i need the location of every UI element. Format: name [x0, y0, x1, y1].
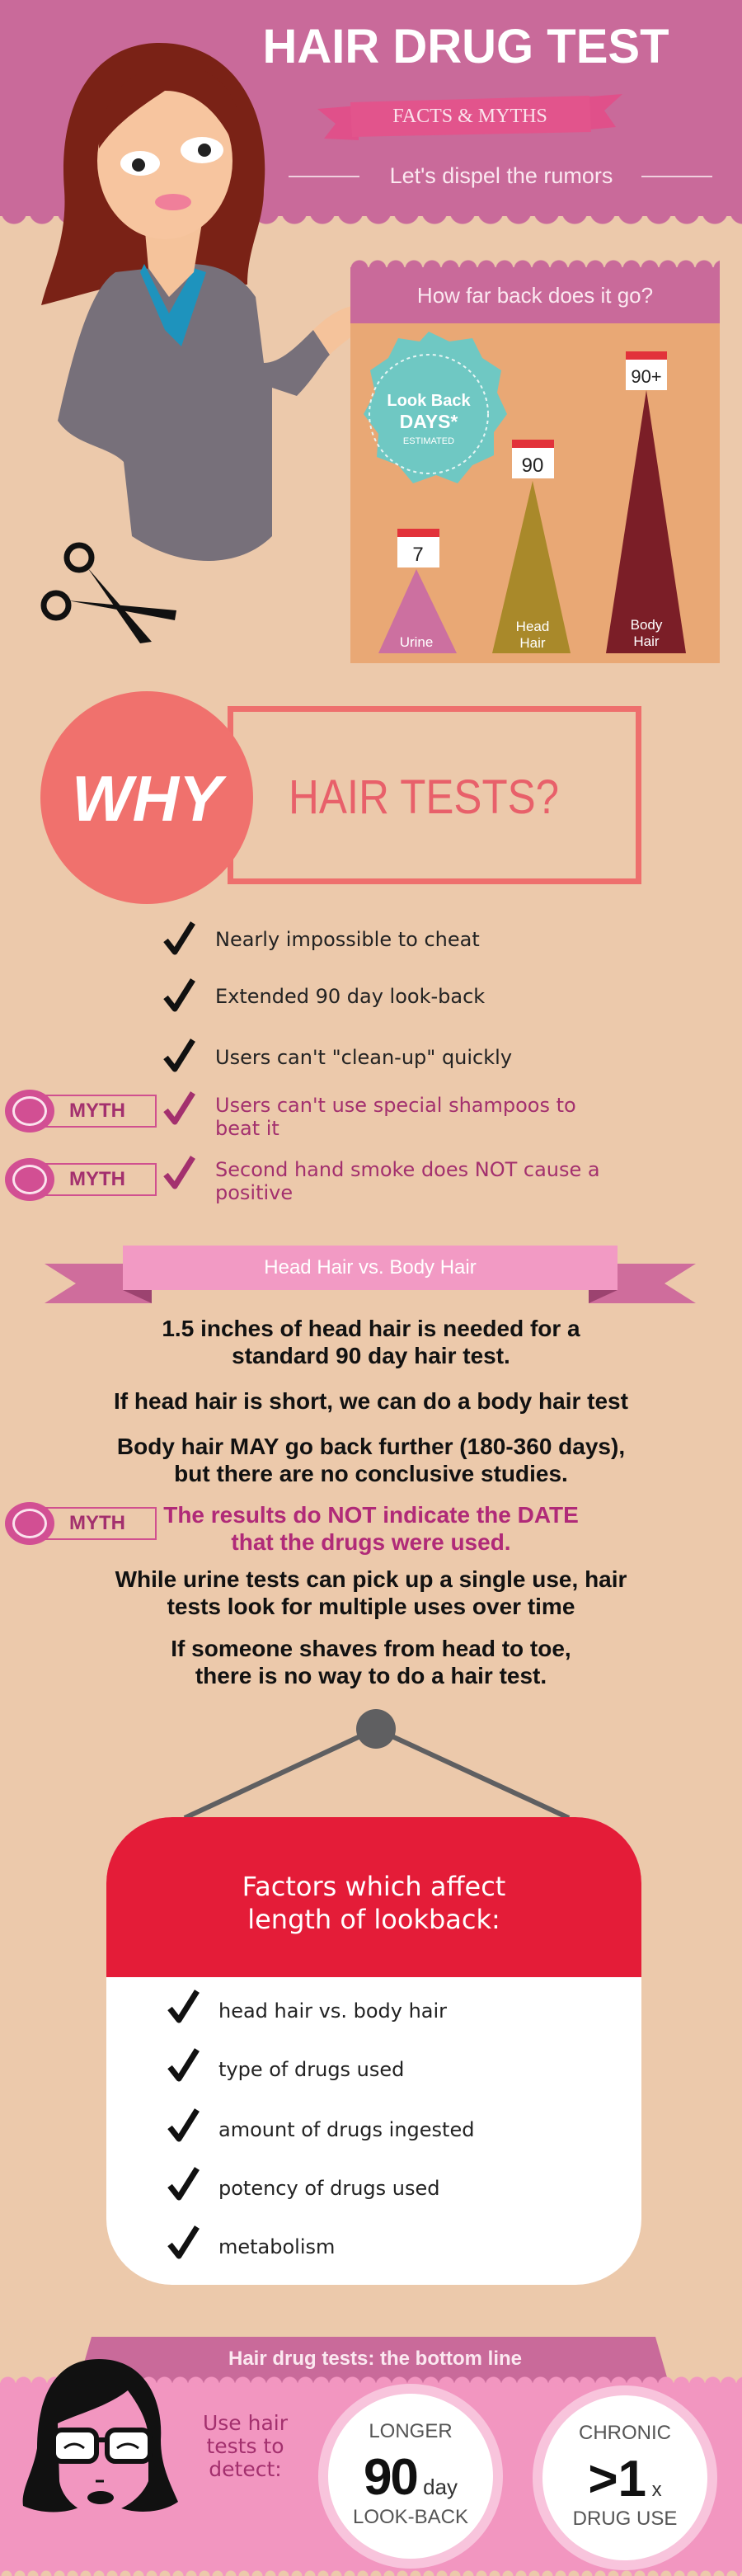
text block: head vs body hair facts: tests look for multiple uses over time [167, 1594, 575, 1619]
text: use hair tests to detect: Use hair [203, 2411, 288, 2435]
myth badge 3: MYTH [69, 1512, 125, 1534]
text: use hair tests to detect: tests to [206, 2434, 284, 2458]
panel: how far back does it go [350, 260, 720, 663]
ribbon: head hair vs body hair: Head Hair vs. Body Hair [264, 1256, 477, 1279]
panel: bottom line [0, 2383, 742, 2576]
factors list: potency of drugs used [218, 2177, 440, 2200]
circle: chronic drug use: DRUG USE [573, 2508, 677, 2530]
factors list: type of drugs used [218, 2058, 404, 2081]
text block: head vs body hair facts: The results do NOT indicate the DATE [163, 1502, 579, 1528]
ribbon: facts & myths: FACTS & MYTHS [392, 106, 547, 127]
text block: head vs body hair facts: that the drugs were used. [231, 1529, 511, 1555]
panel: how far back does it go: 90+ [631, 366, 662, 387]
text block: head vs body hair facts: Body hair MAY go back further (180-360 days), [117, 1434, 625, 1459]
text block: head vs body hair facts: there is no way to do a hair test. [195, 1663, 547, 1688]
list: why reasons: Users can't "clean-up" quickly [215, 1046, 512, 1069]
circle: chronic drug use: CHRONIC [579, 2422, 671, 2444]
heading: why hair tests: WHY [72, 762, 222, 835]
list: why reasons: Users can't use special shampoos to [215, 1094, 576, 1117]
ribbon: facts & myths [317, 94, 622, 140]
myth badge 2: MYTH [69, 1168, 125, 1190]
circle: 90 day look-back [318, 2384, 503, 2569]
circle: chronic drug use: >1 x [588, 2451, 662, 2508]
panel: how far back does it go: 7 [412, 544, 424, 566]
circle: 90 day look-back: LONGER [369, 2420, 453, 2442]
myth badge 2 [5, 1158, 157, 1201]
icon: sign hanger [183, 1709, 571, 1817]
title: HAIR DRUG TEST [262, 20, 669, 73]
panel: how far back does it go: How far back does it go? [417, 283, 653, 308]
text block: head vs body hair facts: standard 90 day hair test. [232, 1343, 510, 1368]
circle: 90 day look-back: 90 day [364, 2449, 458, 2506]
panel: how far back does it go: DAYS* [400, 411, 458, 432]
panel: how far back does it go: Hair [519, 635, 546, 651]
banner: bottom line [84, 2337, 667, 2383]
list: why reasons: beat it [215, 1117, 279, 1140]
text: use hair tests to detect: detect: [209, 2457, 282, 2481]
circle: 90 day look-back: LOOK-BACK [353, 2506, 468, 2528]
sign header [106, 1817, 641, 1977]
sign header: Factors which affect [242, 1871, 505, 1902]
panel: factors sign [106, 1817, 641, 2285]
list: why reasons [163, 921, 600, 1204]
list: why reasons: positive [215, 1181, 293, 1204]
text block: head vs body hair facts [114, 1316, 628, 1688]
panel: how far back does it go: Hair [633, 633, 660, 649]
heading: why hair tests: HAIR TESTS? [289, 770, 559, 824]
banner: bottom line: Hair drug tests: the bottom line [228, 2348, 522, 2370]
illustration: business woman [41, 43, 350, 561]
myth badge 1: MYTH [69, 1100, 125, 1122]
factors list: metabolism [218, 2235, 335, 2258]
heading: why hair tests [40, 691, 641, 904]
factors list [167, 1990, 474, 2258]
text block: head vs body hair facts: If someone shaves from head to toe, [171, 1636, 571, 1661]
text: use hair tests to detect [203, 2411, 288, 2481]
icon: woman with glasses [23, 2359, 178, 2512]
panel: how far back does it go: Head [516, 619, 549, 634]
panel: how far back does it go: Look Back [387, 392, 471, 410]
panel: how far back does it go: Body [631, 617, 663, 633]
circle: chronic drug use [533, 2385, 717, 2570]
sign header: length of lookback: [247, 1904, 500, 1935]
panel: how far back does it go: ESTIMATED [403, 436, 454, 446]
panel: how far back does it go: 90 [522, 454, 543, 477]
text block: head vs body hair facts: 1.5 inches of head hair is needed for a [162, 1316, 580, 1341]
text block: head vs body hair facts: but there are no conclusive studies. [174, 1461, 568, 1486]
panel: how far back does it go: Urine [400, 634, 433, 650]
factors list: amount of drugs ingested [218, 2118, 474, 2141]
list: why reasons: Second hand smoke does NOT cause a [215, 1158, 600, 1181]
icon: scissors [41, 543, 176, 643]
myth badge 3 [5, 1502, 157, 1545]
text block: head vs body hair facts: If head hair is short, we can do a body hair test [114, 1388, 628, 1414]
ribbon: head hair vs body hair [45, 1246, 696, 1303]
factors list: head hair vs. body hair [218, 1999, 447, 2023]
text block: head vs body hair facts: While urine tests can pick up a single use, hair [115, 1566, 627, 1592]
list: why reasons: Nearly impossible to cheat [215, 928, 480, 951]
list: why reasons: Extended 90 day look-back [215, 985, 485, 1008]
subtitle: let's dispel the rumors: Let's dispel the rumors [390, 163, 613, 188]
header band [0, 0, 742, 216]
myth badge 1 [5, 1090, 157, 1133]
